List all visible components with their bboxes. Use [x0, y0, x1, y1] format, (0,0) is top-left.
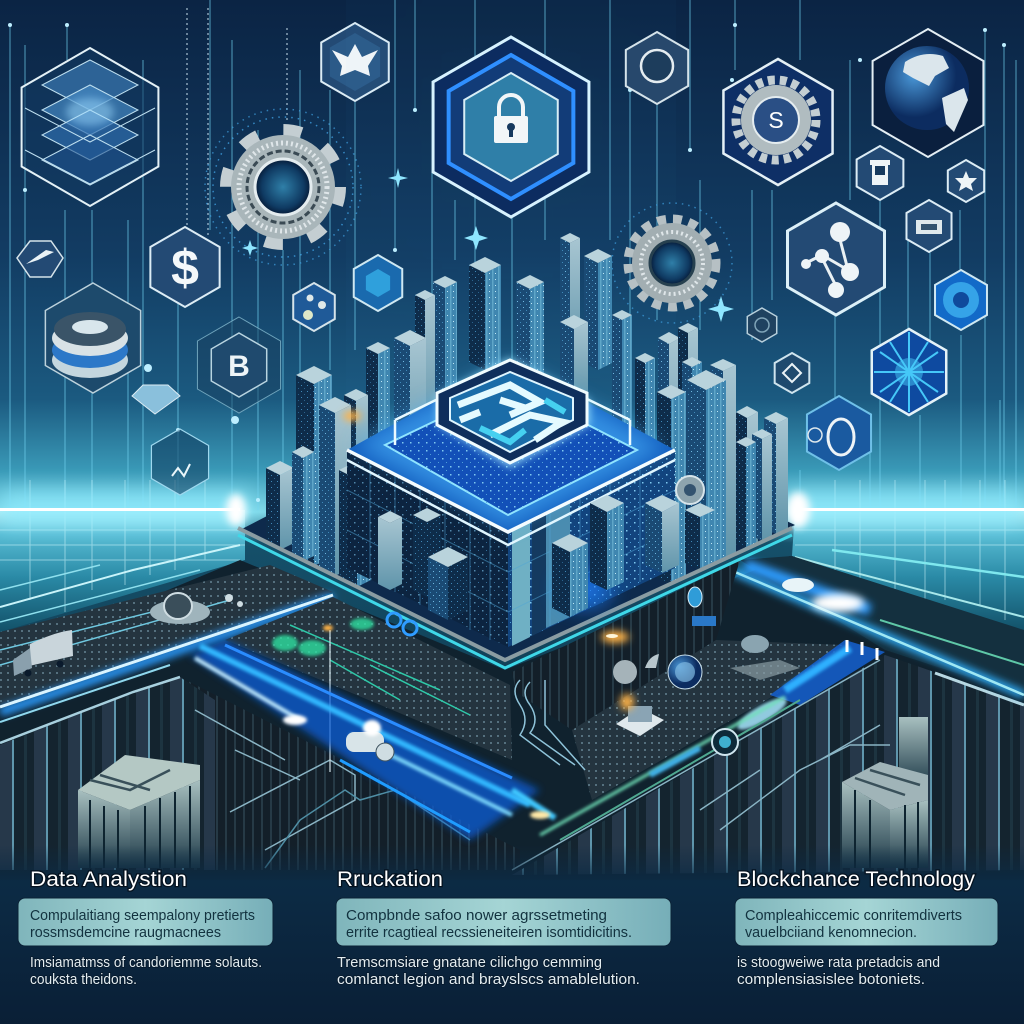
box text: Compulaitiang seempalony pretierts	[30, 908, 255, 924]
body text: Imsiamatmss of candoriemme solauts.	[30, 955, 262, 971]
hexagon: network nodes	[788, 203, 884, 315]
cube right wall	[508, 450, 675, 647]
icon: padlock	[494, 95, 528, 143]
left road	[0, 565, 333, 722]
hexagon: star small	[948, 160, 984, 202]
hexagon: star	[321, 23, 389, 101]
cube left wall	[347, 450, 508, 647]
bottom left block	[0, 677, 215, 870]
hexagon: blue mesh small	[354, 255, 402, 311]
blue spark	[559, 572, 611, 608]
glow band: right road	[512, 640, 885, 870]
circuit vertical lines	[10, 0, 1016, 510]
column: ruckation: comlanct legion and brayslscs amablelution.	[337, 972, 640, 988]
hexagon: S gear: S	[768, 107, 784, 133]
hexagon: globe	[873, 29, 983, 157]
hexagon: dollar: $	[171, 240, 199, 296]
hexagon: coin stack	[45, 283, 141, 393]
orange flares	[323, 411, 634, 710]
horizon glow	[0, 490, 1024, 528]
bottom centre block	[180, 677, 520, 870]
hexagon: blue mesh right	[935, 270, 987, 330]
bottom right block	[512, 655, 1024, 875]
column: blockchain: complensiasislee botoniets.	[737, 972, 925, 988]
cube wall grid	[347, 462, 675, 640]
skyline: back buildings	[344, 233, 698, 490]
hexagon: small pair	[747, 308, 809, 393]
hexagon: plane	[17, 241, 63, 277]
hexagon: ring	[807, 396, 871, 470]
column: blockchain: vauelbciiand kenomnecion.	[745, 925, 917, 941]
skyline: side buildings	[266, 357, 788, 587]
column: data analysis: couksta theidons.	[30, 972, 137, 988]
hexagon: data cube	[22, 48, 158, 206]
platform	[240, 390, 795, 660]
heading: Rruckation	[337, 868, 443, 891]
hexagon: outline	[151, 429, 209, 495]
callout box	[735, 898, 998, 946]
callout box	[18, 898, 273, 946]
box text: Compleahiccemic conritemdiverts	[745, 908, 962, 924]
front buildings	[378, 495, 679, 620]
icon: eye ring	[150, 593, 243, 624]
heading: Blockchance Technology	[737, 868, 976, 891]
column: data analysis: rossmsdemcine raugmacnees	[30, 925, 221, 941]
column: blockchain	[735, 868, 998, 988]
column: ruckation: errite rcagtieal recssieneiteiren isomtidicitins.	[346, 925, 632, 941]
platform rim	[238, 528, 792, 668]
hexagon: emblem	[197, 317, 281, 413]
lower ground base	[0, 556, 1024, 880]
right grid field	[792, 480, 1024, 632]
hexagon: chip	[906, 200, 952, 252]
wires	[515, 680, 585, 770]
icon: car	[346, 720, 394, 761]
deck icons	[613, 587, 800, 755]
cube top	[347, 360, 675, 532]
hexagon: dollar	[150, 227, 220, 307]
data cube stack	[25, 60, 155, 185]
hexagon: main lock	[429, 32, 593, 222]
hexagon: emblem: B	[228, 350, 250, 383]
glow band: blue centre road	[190, 640, 540, 840]
under-platform wall right	[512, 560, 740, 730]
central cube	[347, 358, 675, 647]
callout box	[336, 898, 671, 946]
icon: truck	[13, 630, 73, 676]
left grid field	[0, 480, 245, 632]
gear: left	[205, 109, 361, 265]
status dials	[387, 613, 417, 635]
column: ruckation	[336, 868, 671, 988]
heading: Data Analystion	[30, 868, 187, 891]
hexagon: blue wire globe	[872, 329, 946, 415]
body text: is stoogweiwe rata pretadcis and	[737, 955, 940, 971]
bottom fade	[0, 845, 1024, 1024]
server block: right	[842, 717, 928, 868]
upper right road	[735, 556, 1024, 695]
box text: Compbnde safoo nower agrssetmeting	[346, 908, 607, 924]
glint stars	[242, 168, 734, 322]
server block: left	[78, 755, 200, 868]
column: data analysis	[18, 868, 273, 988]
hexagon: S gear	[723, 59, 833, 185]
icon: diamond	[132, 385, 180, 414]
hexagon: square icon	[857, 146, 903, 200]
gear: right	[612, 203, 732, 323]
logo hexagon	[437, 358, 590, 468]
centre-left deck	[225, 597, 512, 772]
right deck	[515, 640, 845, 800]
dotted drop lines	[187, 8, 313, 430]
hexagon: nodes small	[293, 283, 335, 331]
body text: Tremscmsiare gnatane cilichgo cemming	[337, 955, 602, 971]
hexagon: top right seal	[626, 32, 688, 104]
node dots on lines	[8, 23, 1006, 502]
